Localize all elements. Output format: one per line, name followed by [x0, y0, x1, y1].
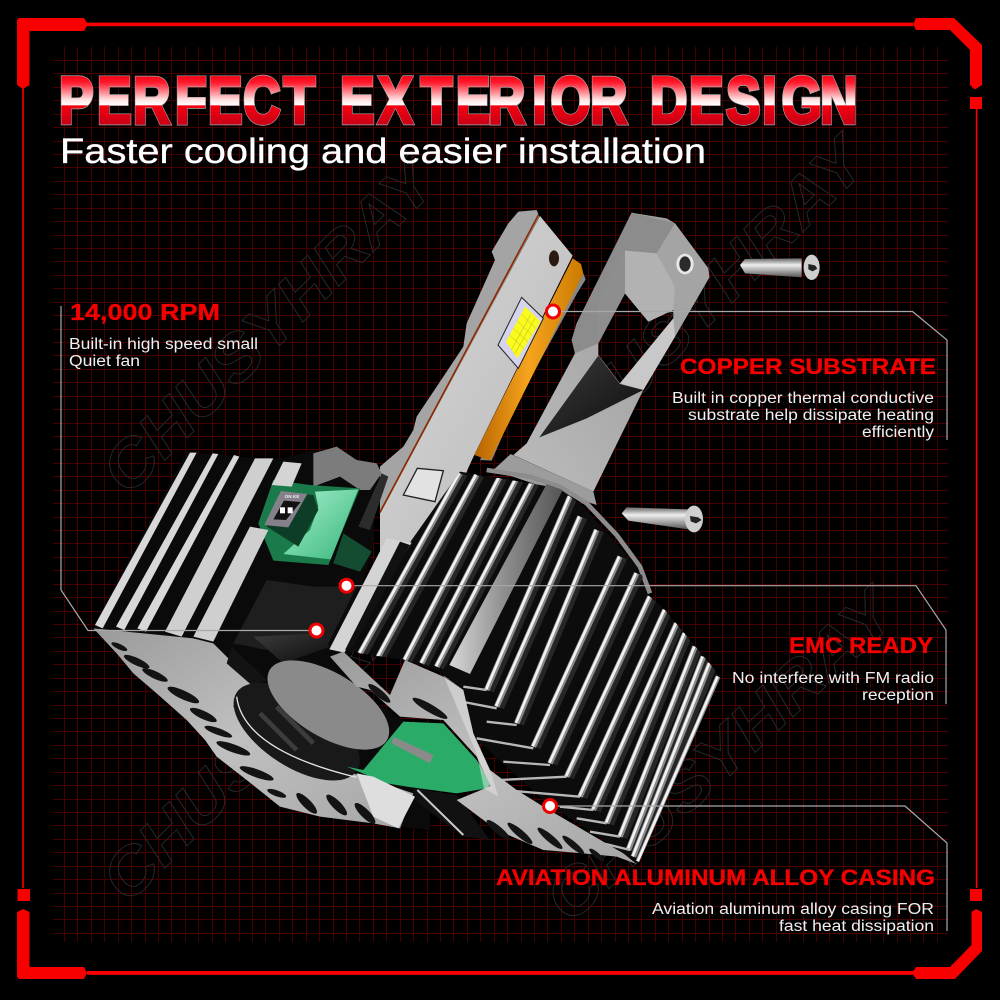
- heading: COPPER SUBSTRATE: [680, 354, 936, 379]
- green fan board: [347, 722, 491, 793]
- title: DESIGN: [650, 63, 857, 137]
- watermarks: CHUSYHRAY: [87, 141, 453, 507]
- marker dot: [544, 800, 556, 812]
- aluminium plate: [380, 216, 573, 553]
- front face with slots: [93, 628, 413, 828]
- marker dot: [546, 305, 560, 318]
- driver circuit board: [258, 480, 372, 572]
- thick cylinder fin: [449, 484, 563, 674]
- mounting bracket: [513, 213, 709, 492]
- marker dot: [340, 579, 353, 592]
- fin feet: [462, 687, 630, 850]
- side lug: [313, 447, 382, 490]
- block dark base: [93, 450, 430, 830]
- bracket base collar: [493, 454, 597, 505]
- title: PERFECT: [59, 63, 315, 137]
- callout: EMC ready: [340, 579, 946, 704]
- watermarks: CHUSYHRAY: [530, 572, 913, 935]
- left heat-sink block, top side: [93, 447, 430, 830]
- leader line: [550, 806, 947, 931]
- callout: 14,000 RPM: Quiet fan: [69, 353, 140, 370]
- leader line: [346, 586, 946, 704]
- callout: 14,000 RPM: [61, 299, 323, 637]
- fan board and shroud: [347, 722, 491, 840]
- description: Aviation aluminum alloy casing FOR: [652, 901, 934, 918]
- bracket arm and screws: [493, 213, 820, 532]
- callout: aviation aluminum casing: fast heat dissipation: [779, 918, 934, 935]
- title: EXTERIOR: [340, 63, 627, 137]
- title: [59, 63, 857, 137]
- description: No interfere with FM radio: [732, 670, 934, 687]
- LED chip: [498, 297, 543, 368]
- watermarks: CHUSYHRAY: [514, 120, 884, 490]
- top bumps: [487, 470, 650, 593]
- fan hub disc: [253, 642, 403, 768]
- title: DESIGN: [650, 63, 857, 137]
- dark shroud: [413, 788, 490, 840]
- right heat-sink block: [329, 470, 723, 864]
- description: Built in copper thermal conductive: [672, 390, 934, 407]
- callout: copper substrate: [546, 305, 947, 441]
- product: exploded LED bulb: [93, 210, 820, 864]
- fin body dark base: [345, 472, 720, 863]
- title: PERFECT: [59, 63, 315, 137]
- lower screw: [622, 506, 703, 532]
- callout: EMC ready: reception: [862, 687, 934, 704]
- callout: aviation aluminum casing: [496, 800, 947, 935]
- DIP switch: ON KE: [285, 494, 299, 499]
- leader line: [553, 312, 947, 440]
- upper screw: [740, 255, 820, 280]
- fan opening: [217, 663, 376, 800]
- heading: AVIATION ALUMINUM ALLOY CASING: [496, 865, 935, 890]
- callout: copper substrate: substrate help dissipate heating: [688, 407, 934, 424]
- arm side body: [380, 210, 539, 515]
- callout: copper substrate: efficiently: [862, 424, 934, 441]
- copper substrate: [480, 273, 586, 461]
- interior fan frame: [233, 580, 357, 650]
- marker dot: [310, 624, 323, 637]
- front face: [330, 652, 637, 864]
- heading: EMC READY: [789, 633, 933, 658]
- fin stripes: [359, 473, 723, 863]
- leader line: [61, 306, 316, 630]
- title: EXTERIOR: [340, 63, 627, 137]
- heading: 14,000 RPM: [70, 299, 220, 325]
- watermarks: [87, 120, 913, 935]
- description: Built-in high speed small: [69, 336, 258, 353]
- subtitle: Faster cooling and easier installation: [60, 132, 706, 171]
- first thick fin: [329, 538, 412, 653]
- LED arm: [380, 210, 586, 553]
- watermarks: CHUSYHRAY: [87, 549, 453, 915]
- block fins: [95, 453, 302, 642]
